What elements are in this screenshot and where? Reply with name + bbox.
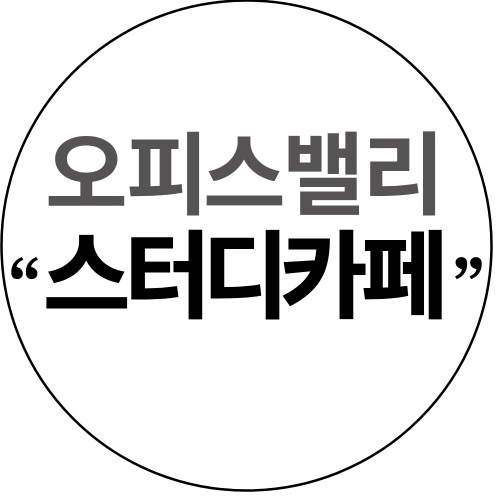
heading line 2: 스터디카페 — [43, 225, 448, 331]
heading line 1: 오피스밸리 — [45, 127, 445, 227]
